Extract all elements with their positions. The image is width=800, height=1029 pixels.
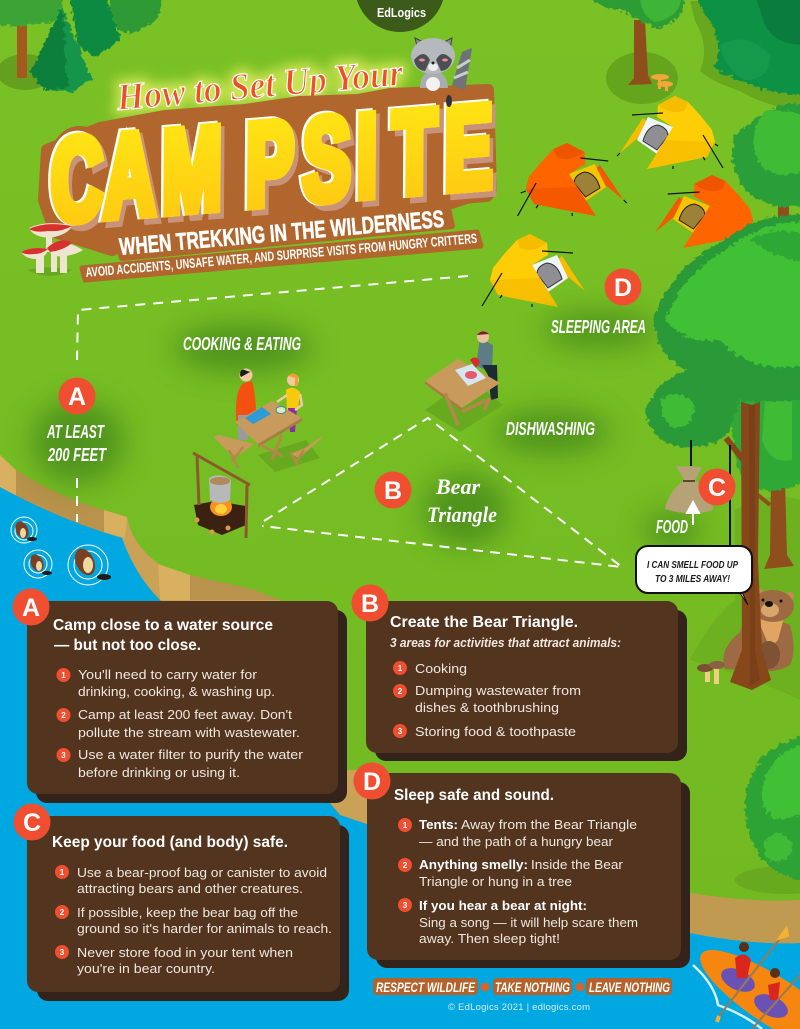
panel B list: 3: [398, 727, 403, 736]
label: bear triangle: Bear: [435, 474, 480, 499]
map badge A: A: [68, 383, 86, 411]
badge C: C: [23, 809, 41, 837]
tree: small behind big tree: [732, 395, 800, 569]
trees: top left: [0, 0, 162, 92]
title block: [44, 52, 497, 280]
panel D list: 1: [403, 821, 408, 830]
speech bubble: I CAN SMELL FOOD UP: [647, 559, 739, 571]
rope and food bag: [665, 440, 730, 545]
subtitle band: avoid accidents: [82, 231, 481, 280]
label: bear triangle: [427, 474, 497, 527]
panel C list: Use a bear-proof bag or canister to avoid: [77, 865, 327, 880]
slogan strip: LEAVE NOTHING: [589, 980, 670, 995]
panel A list: 2: [61, 711, 66, 720]
panel D list: [398, 817, 638, 946]
panel C list: Never store food in your tent when: [77, 945, 293, 960]
panel B: bear triangle: [352, 584, 687, 761]
panel D list: Away from the Bear Triangle: [461, 817, 637, 832]
subtitle band: when trekking: [113, 204, 452, 261]
map badge C: [698, 468, 736, 506]
tent: orange right: [655, 175, 753, 248]
speech bubble: TO 3 MILES AWAY!: [655, 573, 730, 585]
panel C list: attracting bears and other creatures.: [77, 881, 303, 896]
tent: orange left: [518, 143, 627, 216]
title backing shape: CAMPSITE: [50, 82, 491, 249]
badge B: [352, 584, 388, 622]
picnic table: cooking and eating: [214, 368, 322, 472]
slogan strip: RESPECT WILDLIFE: [376, 980, 476, 995]
label: cooking and eating: COOKING & EATING: [183, 334, 301, 354]
badge A: A: [22, 594, 40, 622]
ground shadow under big trees: [690, 497, 800, 700]
panel C list: 2: [60, 908, 65, 917]
bear: [723, 588, 794, 671]
panel B heading: Create the Bear Triangle.: [390, 614, 578, 631]
panel C list: [55, 865, 332, 976]
panel A list: before drinking or using it.: [78, 765, 240, 780]
label: dishwashing: DISHWASHING: [506, 419, 595, 439]
panel A list: 1: [61, 671, 66, 680]
label: food: FOOD: [656, 517, 688, 537]
person: man in orange: [236, 368, 256, 440]
map badge C: C: [708, 474, 726, 502]
panel C list: 1: [60, 868, 65, 877]
bush: bottom right: [735, 735, 800, 894]
panel A list: [56, 667, 304, 780]
panel C list: 3: [60, 948, 65, 957]
panel D list: — and the path of a hungry bear: [419, 834, 614, 849]
title: how to set up your: How to Set Up Your: [114, 52, 406, 119]
panel D list: If you hear a bear at night:: [419, 898, 587, 913]
panel D: sleep safe: [354, 762, 690, 968]
label: at least 200 feet: [46, 422, 107, 465]
panel D list: Tents:: [419, 817, 458, 832]
panel C: food safety: [14, 804, 349, 1001]
benches: [214, 435, 254, 456]
panel C list: If possible, keep the bear bag off the: [77, 905, 298, 920]
tree: big tree canopy and trunk: [645, 215, 800, 690]
tent: yellow bottom: [482, 234, 585, 307]
kayak with paddlers: [688, 930, 800, 1029]
label: at least 200 feet: AT LEAST: [46, 422, 105, 442]
panel D list: Inside the Bear: [531, 857, 624, 872]
panel D list: Sing a song — it will help scare them: [419, 915, 638, 930]
footer credit: © EdLogics 2021 | edlogics.com: [448, 1002, 590, 1013]
water and shoreline: [0, 455, 800, 1029]
panel A heading: Camp close to a water source: [53, 617, 273, 634]
panel A: water source: [12, 588, 347, 803]
icon: mushrooms near bear: [697, 661, 725, 684]
map label glows: [32, 312, 700, 548]
tents: [482, 96, 753, 307]
EdLogics logo badge: [355, 0, 445, 32]
panel A list: Use a water filter to purify the water: [78, 747, 304, 762]
panel A list: drinking, cooking, & washing up.: [78, 684, 275, 699]
raccoon: [411, 38, 472, 107]
panel B list: Dumping wastewater from: [415, 683, 581, 698]
panel D list: 2: [403, 861, 408, 870]
map badge A: [58, 378, 96, 414]
panel C list: ground so it's harder for animals to reach.: [77, 921, 332, 936]
dashed distance line: [77, 276, 468, 522]
title: how to set up your: How to Set Up Your: [114, 52, 406, 119]
panel C heading: Keep your food (and body) safe.: [52, 834, 288, 851]
badge B: B: [361, 590, 379, 618]
badge D: D: [363, 768, 381, 796]
arrow to food: [687, 502, 699, 525]
panel D list: Anything smelly:: [419, 857, 528, 872]
label: sleeping area: SLEEPING AREA: [551, 317, 646, 337]
trees: top right with mushrooms: [590, 0, 800, 111]
person: woman in yellow: [277, 374, 302, 432]
EdLogics logo badge: EdLogics: [377, 6, 426, 20]
badge D: [354, 762, 390, 800]
panel A list: 3: [61, 751, 66, 760]
panel D heading: Sleep safe and sound.: [394, 787, 554, 804]
panel B list: 2: [398, 687, 403, 696]
dashed bear triangle: [262, 418, 622, 567]
title: campsite: CAMPSITE: [50, 80, 491, 247]
tent: yellow top: [617, 96, 723, 169]
panel A list: You'll need to carry water for: [78, 667, 258, 682]
title: campsite: CAMPSITE: [48, 79, 490, 247]
map badge B: [374, 472, 412, 508]
panel D list: Triangle or hung in a tree: [419, 874, 572, 889]
panel D list: away. Then sleep tight!: [419, 931, 560, 946]
beavers: [11, 517, 111, 585]
panel B list: Storing food & toothpaste: [415, 724, 576, 739]
slogan strip: TAKE NOTHING: [495, 980, 570, 995]
panel A list: Camp at least 200 feet away. Don't: [78, 707, 292, 722]
panel B list: 1: [398, 664, 403, 673]
label: at least 200 feet: 200 FEET: [47, 445, 107, 465]
icon: orange mushrooms: [651, 74, 673, 91]
picnic table: dishwashing with person: [425, 331, 503, 432]
panel D list: 3: [403, 901, 408, 910]
title: campsite: CAMPSITE: [55, 84, 497, 252]
panel B list: [393, 661, 581, 739]
label: bear triangle: Triangle: [427, 502, 497, 527]
panel A list: pollute the stream with wastewater.: [78, 725, 300, 740]
badge A: [12, 588, 50, 626]
panel A heading: — but not too close.: [54, 637, 201, 654]
title: campsite: CAMPSITE: [52, 80, 494, 247]
panel B heading: [390, 614, 621, 650]
panel B list: dishes & toothbrushing: [415, 700, 559, 715]
map badge D: [604, 268, 642, 306]
subtitle band: avoid accidents: AVOID ACCIDENTS, UNSAFE WATER, AND SURPRISE VISITS FROM HUNGRY CRITTERS: [85, 231, 478, 280]
map badge D: D: [614, 274, 632, 302]
panel C list: you're in bear country.: [77, 961, 215, 976]
subtitle band: when trekking: WHEN TREKKING IN THE WILDERNESS: [118, 206, 445, 261]
campfire with pot: [193, 453, 250, 538]
slogan strip: [373, 978, 672, 995]
tree: small right mid: [732, 103, 800, 220]
panel B heading: 3 areas for activities that attract animals:: [390, 636, 621, 650]
map badge B: B: [384, 477, 402, 505]
panel B list: Cooking: [415, 661, 467, 676]
icon: red mushrooms: [21, 223, 83, 276]
panel A heading: [53, 617, 273, 654]
speech bubble: [636, 546, 752, 605]
badge C: [14, 804, 50, 840]
